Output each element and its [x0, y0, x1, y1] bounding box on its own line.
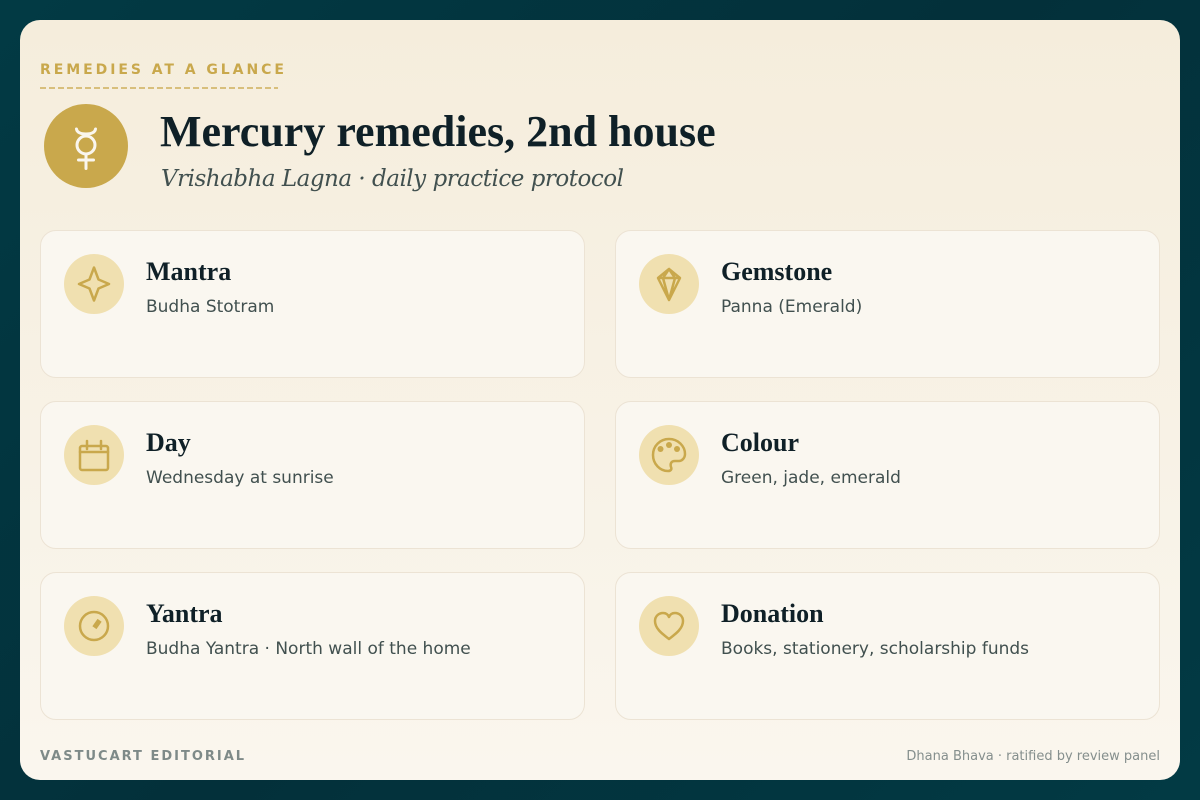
- heading: Yantra: Yantra: [146, 599, 223, 628]
- panel: Yantra: [40, 572, 585, 720]
- heading: Day: Day: [146, 428, 191, 457]
- text: Gemstone detail: Panna (Emerald): [721, 297, 862, 317]
- text: Colour detail: Green, jade, emerald: [721, 468, 901, 488]
- icon: Mercury symbol badge: [44, 104, 128, 188]
- icon: gemstone: [639, 254, 699, 314]
- icon: yantra dial: [64, 596, 124, 656]
- panel: Mantra: [40, 230, 585, 378]
- text: Mantra detail: Budha Stotram: [146, 297, 274, 317]
- panel: Donation: [615, 572, 1160, 720]
- panel: Gemstone: [615, 230, 1160, 378]
- heading: Mantra: Mantra: [146, 257, 231, 286]
- heading: Donation: Donation: [721, 599, 824, 628]
- footer: publisher: VASTUCART EDITORIAL: [40, 749, 246, 764]
- footer: review note: Dhana Bhava · ratified by review panel: [906, 749, 1160, 764]
- text: Donation detail: Books, stationery, scholarship funds: [721, 639, 1029, 659]
- title: Mercury remedies, 2nd house: [160, 107, 716, 156]
- panel: Day: [40, 401, 585, 549]
- icon: four-point star: [64, 254, 124, 314]
- eyebrow label: REMEDIES AT A GLANCE: [40, 62, 287, 78]
- text: Day detail: Wednesday at sunrise: [146, 468, 334, 488]
- text: Yantra detail: Budha Yantra · North wall of the home: [146, 639, 471, 659]
- icon: palette: [639, 425, 699, 485]
- icon: calendar: [64, 425, 124, 485]
- heading: Colour: Colour: [721, 428, 799, 457]
- panel: Colour: [615, 401, 1160, 549]
- icon: heart: [639, 596, 699, 656]
- heading: Gemstone: Gemstone: [721, 257, 832, 286]
- subtitle: Vrishabha Lagna · daily practice protocol: [161, 166, 623, 192]
